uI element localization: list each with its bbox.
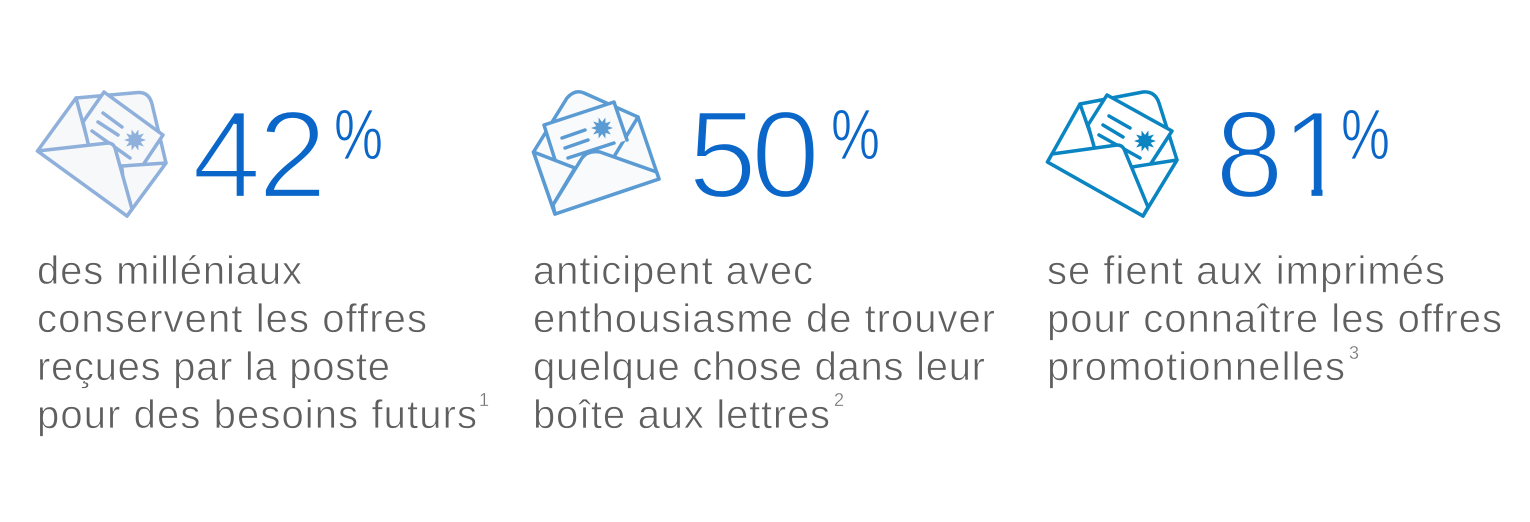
text block: description 3: pour connaître les offres [1047, 297, 1502, 341]
text block: description 2: quelque chose dans leur [533, 345, 985, 389]
text block: description 3 [1047, 249, 1502, 389]
stat number 42: 42 [192, 86, 327, 224]
panel: 42 percent [37, 86, 489, 437]
text block: description 1: pour des besoins futurs [37, 393, 477, 437]
text block: description 2: 2 [834, 390, 844, 410]
text block: description 3: se fient aux imprimés [1047, 249, 1445, 293]
panel: 50 percent [533, 86, 995, 437]
text block: description 1 [37, 249, 489, 437]
percent sign: % [831, 96, 880, 175]
text block: description 1: des milléniaux [37, 249, 302, 293]
icon: open envelope medium blue [534, 92, 659, 214]
icon: open envelope teal blue [1048, 92, 1177, 216]
stat number 81: 81 [1215, 86, 1350, 224]
text block: description 1: reçues par la poste [37, 345, 390, 389]
text block: description 3: promotionnelles [1047, 345, 1345, 389]
text block: description 1: conservent les offres [37, 297, 427, 341]
text block: description 2 [533, 249, 995, 437]
percent sign: % [1341, 96, 1390, 175]
text block: description 3: 3 [1349, 343, 1359, 363]
text block: description 2: enthousiasme de trouver [533, 297, 995, 341]
text block: description 2: boîte aux lettres [533, 393, 830, 437]
panel: 81 percent [1047, 86, 1502, 389]
stat number 50: 50 [688, 86, 820, 224]
icon: open envelope light blue [38, 92, 166, 216]
text block: description 1: 1 [479, 390, 489, 410]
percent sign: % [334, 96, 383, 175]
text block: description 2: anticipent avec [533, 249, 813, 293]
